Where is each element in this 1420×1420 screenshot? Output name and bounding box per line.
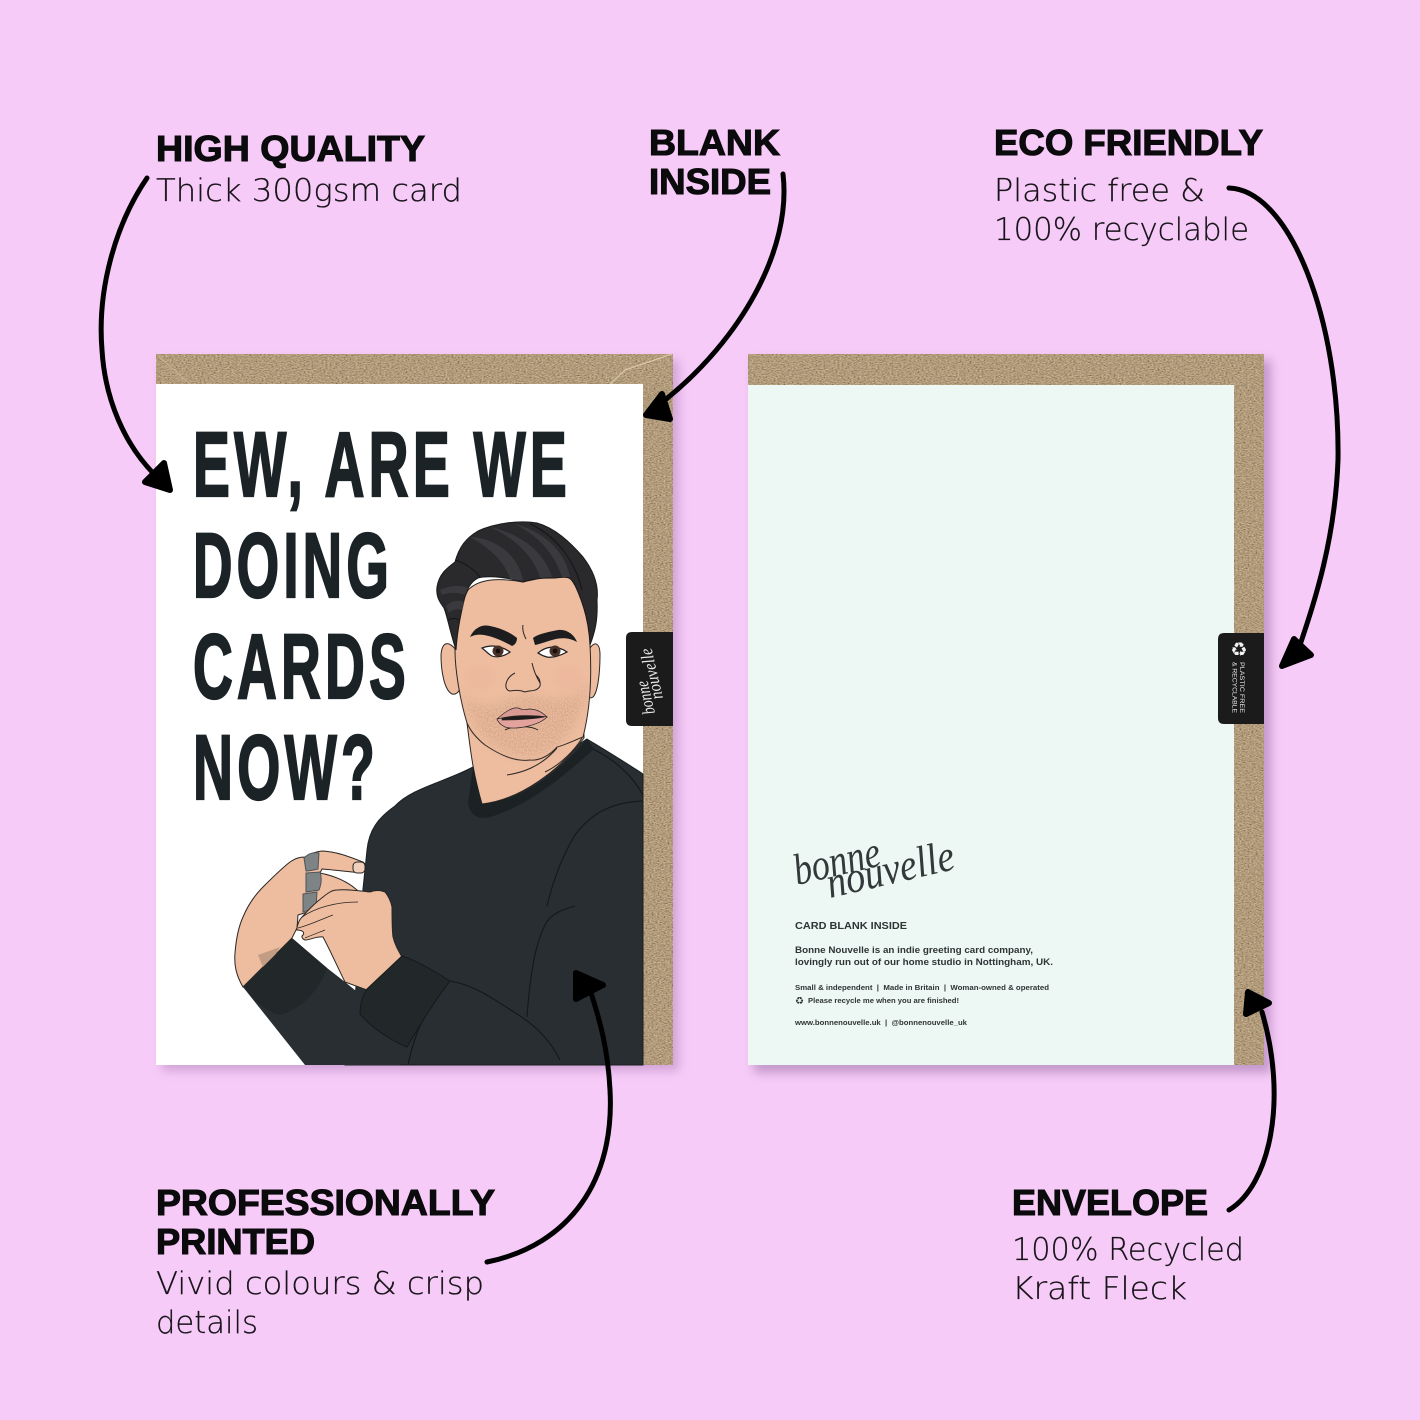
ear left (441, 644, 460, 694)
callout: blank inside (649, 122, 780, 202)
callout: envelope (1012, 1182, 1244, 1307)
callout: envelope: Kraft Fleck (1012, 1271, 1187, 1307)
tag: plastic free (1218, 633, 1264, 724)
tag: plastic free: ♻ (1230, 639, 1248, 661)
tag: bonne nouvelle: bonne (632, 679, 659, 717)
arrow: high quality to card (101, 178, 170, 490)
sweater body (345, 739, 643, 1065)
callout: eco friendly: ECO FRIENDLY (994, 122, 1263, 163)
callout: high quality (156, 128, 462, 209)
back text block: CARD BLANK INSIDE (795, 920, 907, 932)
callout: high quality: HIGH QUALITY (156, 128, 425, 169)
hair (437, 522, 597, 650)
panel: card front with envelope (156, 354, 679, 1071)
callout: eco friendly: 100% recyclable (994, 212, 1249, 248)
arrow: envelope (1229, 992, 1274, 1210)
callout: blank inside: BLANK (649, 122, 780, 163)
callout: eco friendly: Plastic free & (994, 173, 1205, 209)
back sleeve with cuff (243, 938, 400, 1065)
hair strands (448, 524, 582, 620)
sweater seams (408, 749, 643, 1065)
back text block: www.bonnenouvelle.uk | @bonnenouvelle_uk (794, 1018, 968, 1027)
card headline: EW, ARE WE (193, 414, 571, 516)
arrow: eco friendly to tag (1229, 188, 1338, 666)
back hand with rings (235, 851, 366, 987)
card headline (193, 414, 571, 819)
lips (497, 708, 547, 728)
panel: card back with envelope (748, 354, 1271, 1073)
arrow: professionally printed to card (487, 973, 610, 1262)
envelope shadow (back) (754, 360, 1271, 1073)
callout: envelope: 100% Recycled (1012, 1232, 1244, 1268)
callout: eco friendly (994, 122, 1263, 248)
collar (468, 739, 594, 818)
illustration: man in black sweater (235, 522, 643, 1065)
card headline: CARDS (193, 616, 410, 718)
back text block: Bonne Nouvelle is an indie greeting card company, (795, 945, 1033, 956)
cheek blush (464, 664, 583, 692)
silver rings (303, 853, 321, 912)
eyes (482, 646, 567, 657)
back text block (794, 920, 1053, 1027)
callout: high quality: Thick 300gsm card (156, 173, 462, 209)
callout: professionally printed: PRINTED (156, 1221, 315, 1262)
kraft envelope (back) (748, 354, 1264, 1065)
tag: plastic free: PLASTIC FREE (1238, 662, 1245, 713)
nose and face lines (505, 625, 582, 775)
callout: blank inside: INSIDE (649, 161, 771, 202)
back text block: ♻ (795, 996, 804, 1007)
envelope shadow (front) (162, 360, 679, 1071)
bonne nouvelle logo: nouvelle (821, 831, 959, 908)
fingernail (353, 862, 365, 873)
card headline: DOING (193, 515, 393, 617)
white card face (156, 384, 643, 1065)
face (455, 576, 591, 760)
front cuff (360, 956, 450, 1047)
ear right (587, 644, 600, 698)
neck (467, 700, 584, 804)
back text block: Small & independent | Made in Britain | Woman-owned & operated (795, 983, 1049, 992)
tag: plastic free: & RECYCLABLE (1230, 662, 1238, 713)
arrow: blank inside to card (646, 174, 784, 419)
callout: envelope: ENVELOPE (1012, 1182, 1208, 1223)
hair highlights (440, 524, 570, 613)
wrist shade (258, 947, 280, 972)
bonne nouvelle logo: bonne (788, 827, 885, 895)
card headline: NOW? (193, 717, 379, 819)
callout: professionally printed: details (156, 1305, 258, 1341)
mint card back (748, 385, 1234, 1065)
callout: professionally printed: Vivid colours & crisp (156, 1266, 484, 1302)
tag: bonne nouvelle (626, 632, 673, 726)
tag: bonne nouvelle: nouvelle (636, 646, 667, 702)
eyebrows (470, 625, 577, 646)
back text block: lovingly run out of our home studio in Nottingham, UK. (795, 957, 1053, 968)
callout: professionally printed: PROFESSIONALLY (156, 1182, 495, 1223)
back text block: Please recycle me when you are finished! (808, 996, 959, 1005)
front hand (297, 890, 402, 990)
kraft envelope (front) (156, 354, 673, 1065)
stubble (462, 680, 588, 758)
callout: professionally printed (156, 1182, 495, 1341)
